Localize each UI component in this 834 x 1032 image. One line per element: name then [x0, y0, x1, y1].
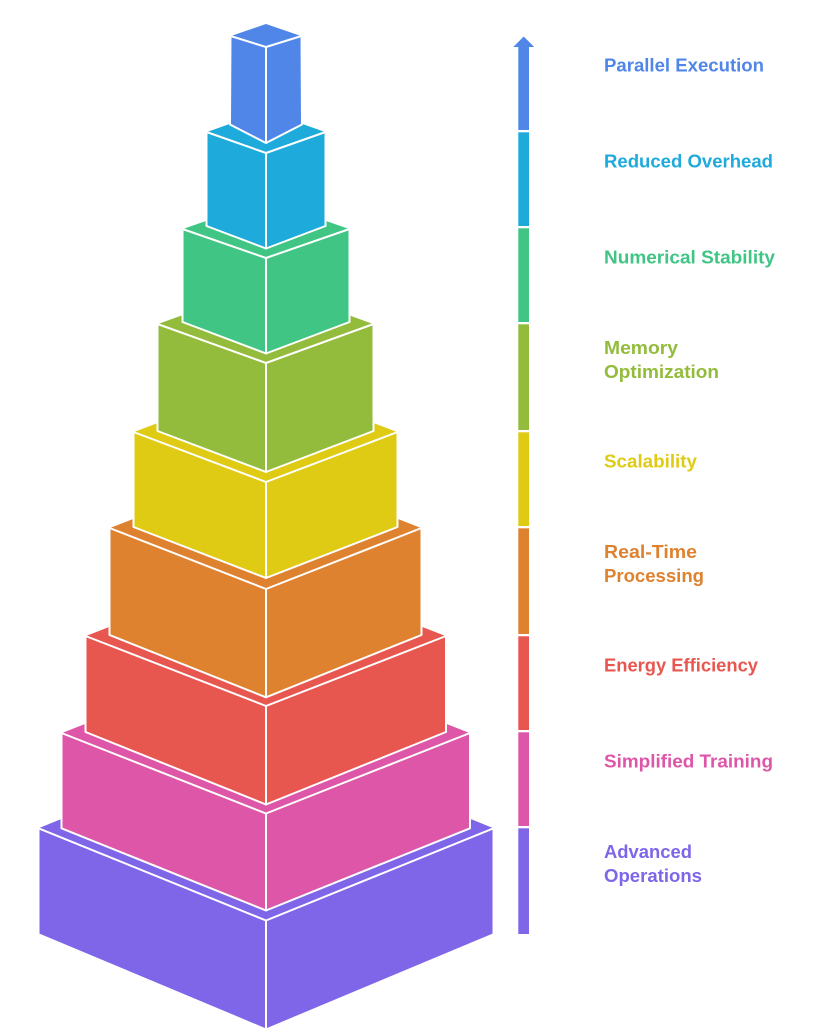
block: Scalability	[134, 382, 398, 578]
label: Memory Optimization: Memory	[604, 338, 678, 358]
block: Numerical Stability	[182, 200, 350, 354]
label: Scalability: Scalability	[604, 452, 697, 472]
label: Real-Time Processing: Processing	[604, 566, 704, 586]
label: Simplified Training: Simplified Training	[604, 752, 773, 772]
block: Energy Efficiency	[86, 566, 446, 804]
label: Advanced Operations: Operations	[604, 866, 702, 886]
label: Advanced Operations	[604, 842, 702, 886]
label: Reduced Overhead: Reduced Overhead	[604, 152, 773, 172]
label: Memory Optimization: Optimization	[604, 362, 719, 382]
block: Simplified Training	[62, 653, 470, 910]
arrow: stacked colour scale	[513, 36, 534, 934]
block: Parallel Execution	[230, 24, 302, 143]
label: Real-Time Processing	[604, 542, 704, 586]
block: Reduced Overhead	[206, 111, 326, 248]
label: Numerical Stability: Numerical Stability	[604, 248, 775, 268]
label: Energy Efficiency: Energy Efficiency	[604, 656, 758, 676]
block: Memory Optimization	[158, 285, 374, 472]
label: Memory Optimization	[604, 338, 719, 382]
pyramid	[38, 24, 494, 1030]
block: Real-Time Processing	[110, 467, 422, 697]
label: Parallel Execution: Parallel Execution	[604, 56, 764, 76]
labels	[604, 56, 775, 886]
label: Real-Time Processing: Real-Time	[604, 542, 697, 562]
label: Advanced Operations: Advanced	[604, 842, 692, 862]
block: Advanced Operations	[38, 736, 494, 1030]
